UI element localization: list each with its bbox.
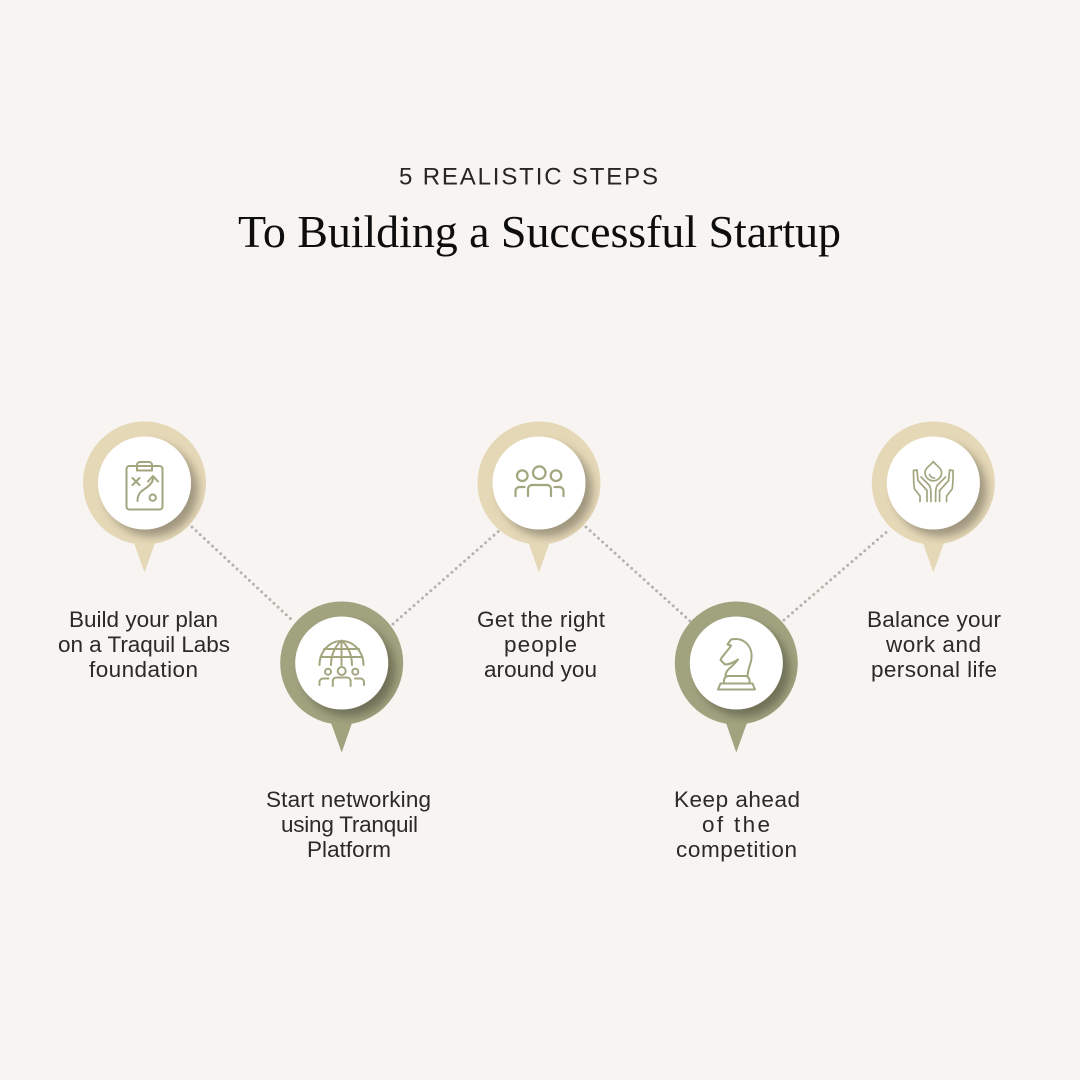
label: work and — [885, 632, 981, 657]
label: Build your plan — [69, 607, 218, 632]
label: foundation — [89, 657, 198, 682]
label: using Tranquil — [281, 812, 418, 837]
icon: hands holding water drop — [914, 462, 953, 502]
label — [266, 787, 431, 862]
pin: olive — [280, 602, 403, 752]
icon: clipboard game plan — [126, 462, 162, 510]
label — [867, 607, 1002, 682]
dotted connectors — [192, 527, 890, 624]
icon: globe and people — [320, 640, 364, 686]
pin: beige — [83, 422, 206, 572]
subtitle: 5 REALISTIC STEPS — [399, 164, 658, 190]
pin: beige — [478, 422, 600, 572]
label: personal life — [871, 657, 997, 682]
step 3: get the right people — [477, 422, 606, 682]
label: Keep ahead — [674, 787, 800, 812]
label — [477, 607, 606, 682]
title: To Building a Successful Startup — [238, 206, 841, 257]
label: people — [504, 632, 577, 657]
pin: beige — [872, 422, 995, 572]
label: Balance your — [867, 607, 1002, 632]
step 5: balance work and life — [867, 422, 1002, 682]
step 4: keep ahead — [674, 602, 800, 862]
step 1: build your plan — [58, 422, 230, 682]
icon: chess knight — [718, 639, 755, 690]
label: Platform — [307, 837, 391, 862]
label: Get the right — [477, 607, 606, 632]
label: on a Traquil Labs — [58, 632, 230, 657]
label — [674, 787, 800, 862]
label: of the — [702, 812, 770, 837]
icon: team of three — [516, 466, 564, 496]
pin: olive — [675, 602, 798, 752]
label: around you — [484, 657, 597, 682]
label: Start networking — [266, 787, 431, 812]
label — [58, 607, 230, 682]
step 2: start networking — [266, 602, 431, 862]
label: competition — [676, 837, 797, 862]
